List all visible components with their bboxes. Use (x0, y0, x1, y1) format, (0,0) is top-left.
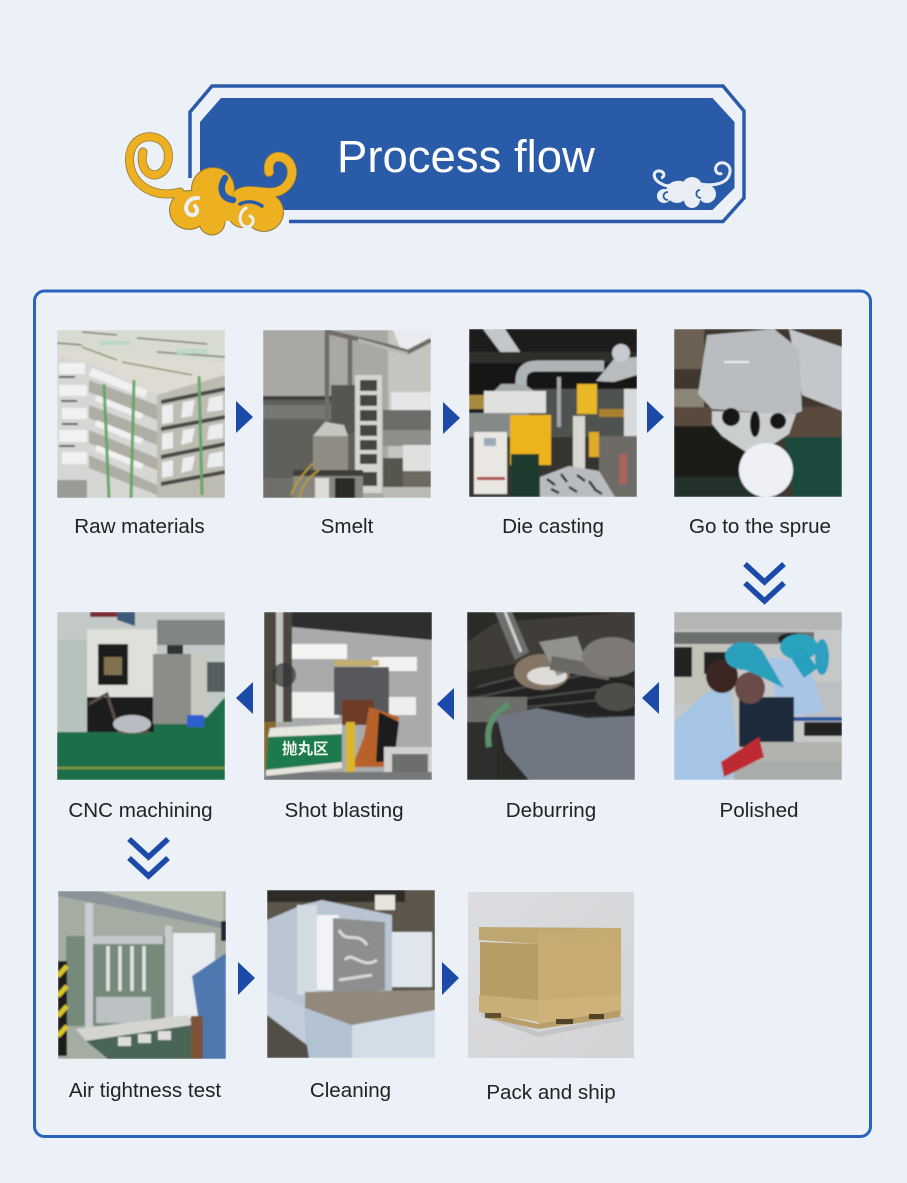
label: deburring: Deburring (506, 799, 596, 822)
label: polished: Polished (720, 799, 798, 822)
title banner (130, 86, 744, 236)
photo: deburring (467, 612, 642, 780)
arrow: smelt to die casting (443, 402, 460, 434)
arrow: cleaning to pack (442, 962, 459, 995)
label: cleaning: Cleaning (310, 1079, 391, 1102)
photo: CNC machining (57, 612, 225, 780)
photo: polishing workers (674, 612, 842, 780)
label: die casting: Die casting (502, 515, 604, 538)
arrow: polished to deburring (642, 682, 659, 714)
photo: smelting furnace (263, 330, 431, 498)
panel: process steps (34, 291, 870, 1136)
arrow: air test to cleaning (238, 962, 255, 995)
photo: air tightness tester (58, 891, 226, 1059)
label: raw materials: Raw materials (74, 515, 205, 538)
label: air tightness test: Air tightness test (69, 1079, 221, 1102)
photo: shot blasting (264, 612, 432, 780)
icon: white cloud (654, 163, 730, 208)
arrow: die casting to sprue (647, 401, 664, 433)
photo: raw materials (57, 330, 225, 498)
heading: Process flow: Process flow (337, 131, 595, 182)
arrow: double chevron down to polished (745, 564, 784, 601)
photo: cardboard crate (468, 892, 634, 1058)
icon: gold cloud (130, 137, 292, 236)
photo: die casting machine (469, 329, 637, 497)
arrow: double chevron down to air tightness test (129, 839, 168, 876)
arrow: shot blasting to CNC (236, 682, 253, 714)
label: go to the sprue: Go to the sprue (689, 515, 831, 538)
label: smelt: Smelt (321, 515, 374, 538)
photo: sprue removal (674, 329, 842, 497)
label: shot blasting: Shot blasting (284, 799, 404, 822)
label: CNC machining: CNC machining (68, 799, 213, 822)
label: pack and ship: Pack and ship (486, 1081, 616, 1104)
sign text: 抛丸区 (282, 740, 329, 758)
arrow: raw materials to smelt (236, 401, 253, 433)
arrow: deburring to shot blasting (437, 688, 454, 720)
photo: cleaning line (267, 890, 435, 1058)
